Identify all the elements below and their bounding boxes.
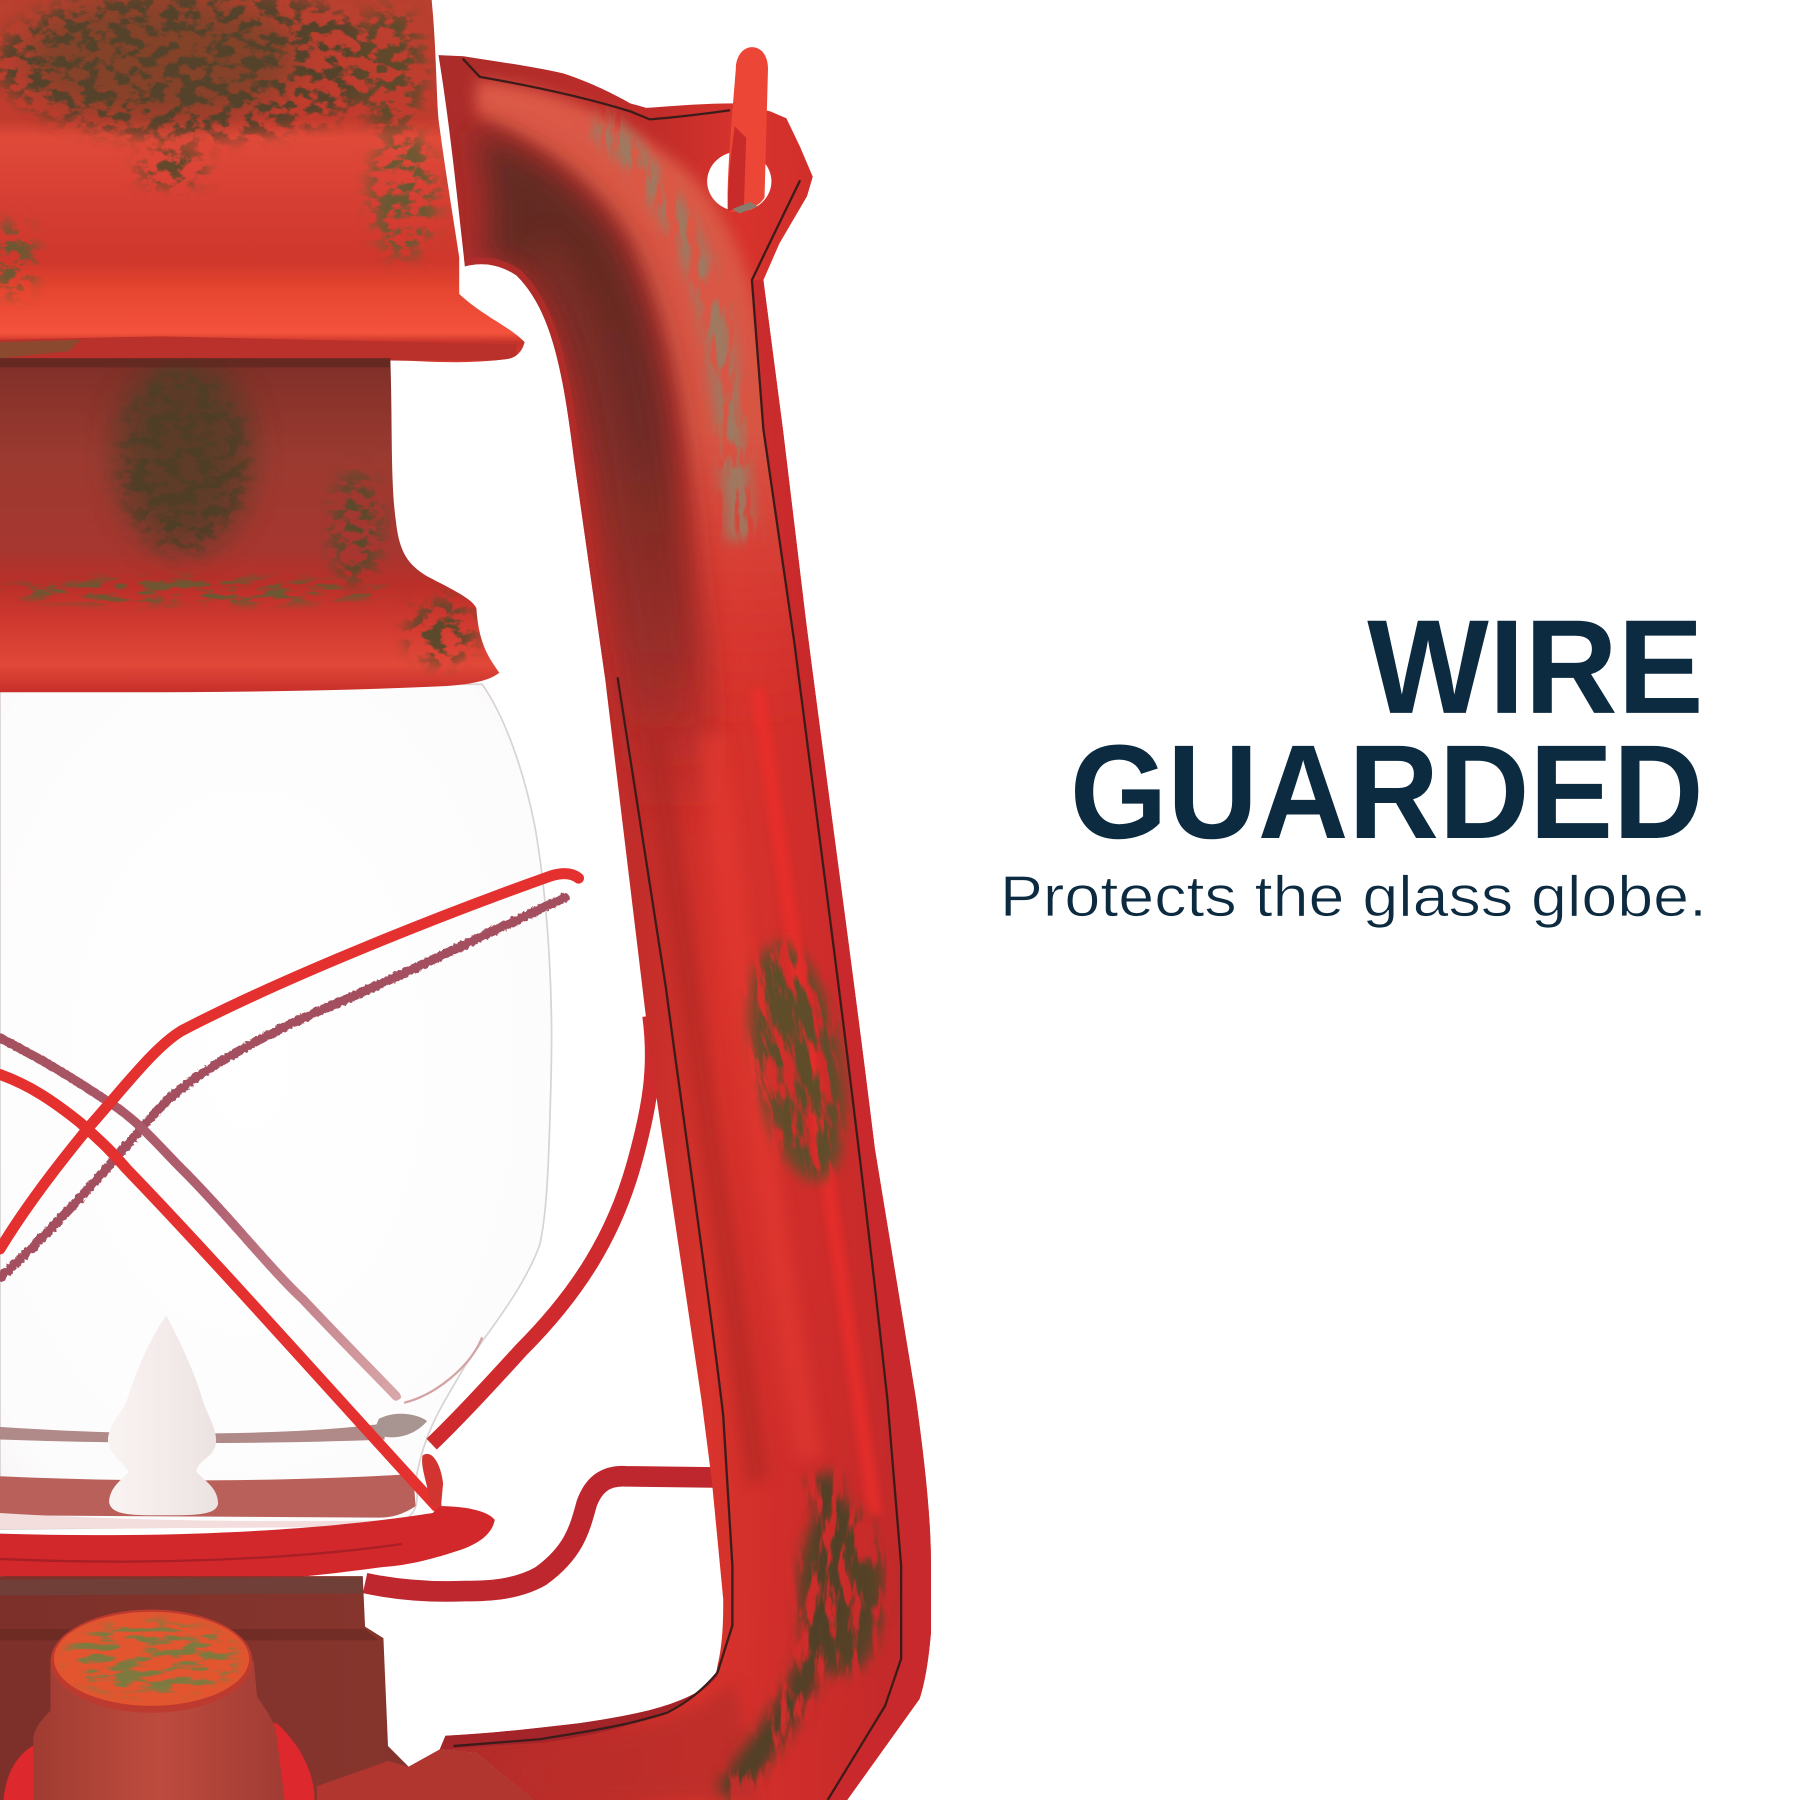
tube bottom shading	[616, 1685, 757, 1800]
tube salmon highlight	[470, 76, 786, 613]
base plate	[0, 1454, 495, 1583]
side wire support	[432, 1016, 652, 1444]
rear wire guard	[0, 898, 565, 1396]
lever handle	[365, 1476, 714, 1591]
inner flange	[465, 264, 605, 677]
subheading: Protects the glass globe.	[1000, 865, 1707, 929]
tube bottom flap	[440, 1666, 717, 1749]
heading: wire guarded	[1070, 593, 1704, 867]
lantern	[0, 0, 1033, 1800]
heading line 2: GUARDED	[1070, 718, 1704, 867]
main frame tube	[438, 55, 931, 1800]
hanging ring	[707, 47, 771, 214]
bright streaks	[758, 689, 875, 1515]
tube bend shadow	[473, 129, 726, 827]
lower fuel tank	[0, 1576, 534, 1800]
glass globe	[0, 684, 552, 1529]
lower cap and neck	[0, 356, 499, 692]
flame bulb	[108, 1316, 218, 1515]
tube seams	[453, 59, 901, 1800]
front wire guard	[0, 874, 579, 1506]
fuel cap knob	[33, 1609, 285, 1800]
fuel cap collar	[3, 1723, 315, 1800]
right flange	[753, 280, 931, 1800]
grey weathering	[597, 121, 740, 540]
patina patches	[734, 936, 862, 1188]
heading line 1: WIRE	[1367, 593, 1704, 742]
upper cap	[0, 0, 525, 362]
